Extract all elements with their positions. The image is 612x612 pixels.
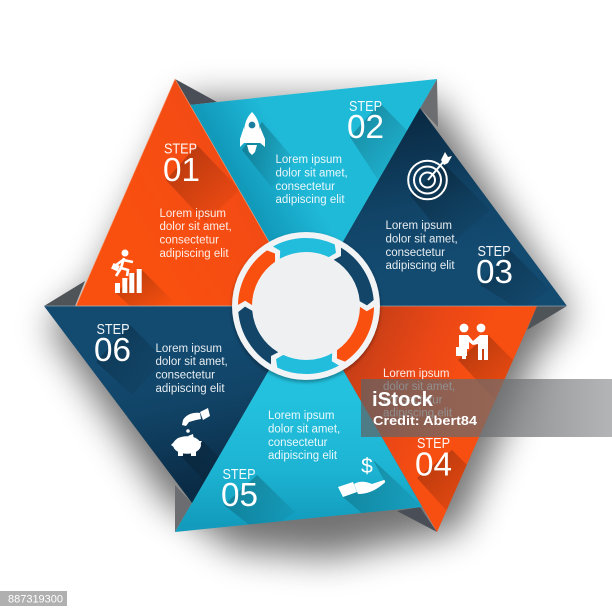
center hub — [231, 232, 381, 382]
text block 04: adipiscing elit — [383, 408, 453, 420]
long shadow: target and number — [410, 165, 550, 310]
watermark text — [372, 388, 478, 428]
text block 06: adipiscing elit — [156, 383, 225, 395]
text block 01: Lorem ipsum — [160, 208, 226, 220]
text block 06: dolor sit amet, — [156, 356, 228, 368]
panel: step 05 — [175, 370, 422, 532]
text block 01: dolor sit amet, — [160, 221, 232, 233]
watermark text: Credit: Abert84 — [373, 413, 478, 428]
step 05 label: STEP — [222, 466, 256, 483]
text block 01: adipiscing elit — [160, 248, 229, 260]
text block 03: adipiscing elit — [386, 260, 455, 272]
panel: step 06 — [44, 306, 269, 503]
text block 04: Lorem ipsum — [383, 368, 449, 380]
text block 05: adipiscing elit — [268, 450, 338, 462]
image id tag — [0, 591, 67, 606]
long shadow: runner and number — [116, 145, 240, 306]
panel: step 02 — [190, 79, 437, 242]
icon: handshake — [456, 324, 488, 360]
text block 01: consectetur — [160, 234, 219, 246]
text block 06: consectetur — [156, 370, 215, 382]
step 01 label: STEP — [164, 140, 197, 158]
step 03 label: 03 — [476, 253, 513, 290]
text block 05 — [268, 410, 340, 462]
text block 03: consectetur — [386, 247, 445, 259]
text block 03: dolor sit amet, — [386, 234, 458, 246]
icon: piggy bank — [171, 408, 210, 456]
divider line — [44, 306, 567, 307]
icon: hand with coin: $ — [361, 455, 373, 478]
text block 01 — [160, 208, 232, 260]
folded corners — [44, 79, 567, 532]
text block 04: dolor sit amet, — [383, 381, 455, 393]
icon: hand with coin — [338, 455, 385, 497]
text block 05: dolor sit amet, — [268, 424, 340, 436]
panel: step 01 — [76, 78, 270, 306]
step 05 label: 05 — [221, 476, 258, 513]
circular arrows — [231, 238, 381, 374]
step 02 label: STEP — [349, 98, 382, 115]
icon: runner on bars — [111, 250, 142, 293]
text block 02: dolor sit amet, — [276, 168, 348, 180]
panel: step 04 — [343, 306, 537, 532]
text block 02 — [276, 154, 348, 206]
text block 02: adipiscing elit — [276, 194, 345, 206]
step 06 label: STEP — [96, 321, 130, 338]
step 06 label: 06 — [94, 331, 131, 368]
step 01 label: 01 — [163, 151, 200, 188]
text block 06: Lorem ipsum — [156, 343, 222, 355]
icon: rocket — [240, 112, 265, 155]
panel: step 03 — [343, 108, 567, 306]
long shadow: handshake and number — [417, 335, 513, 510]
text block 03 — [386, 220, 458, 272]
icon: target — [408, 152, 452, 199]
text block 03: Lorem ipsum — [386, 220, 452, 232]
text block 04 — [383, 368, 455, 420]
text block 02: consectetur — [276, 181, 335, 193]
step 03 label: STEP — [478, 243, 510, 260]
text block 05: consectetur — [268, 437, 328, 449]
image id tag: 887319300 — [8, 594, 63, 606]
inner disc — [252, 252, 360, 360]
long shadow: hand and number — [224, 460, 416, 524]
text block 04: consectetur — [383, 394, 443, 406]
step 04 label: 04 — [415, 446, 452, 482]
long shadow: rocket and number — [242, 103, 418, 188]
watermark text: iStock — [372, 388, 434, 411]
drop shadow — [48, 100, 570, 558]
text block 02: Lorem ipsum — [276, 154, 342, 166]
watermark band — [361, 379, 612, 437]
text block 05: Lorem ipsum — [268, 410, 334, 422]
text block 06 — [156, 343, 228, 395]
long shadow: piggy and number — [96, 325, 218, 475]
step 02 label: 02 — [347, 108, 384, 145]
step 04 label: STEP — [417, 435, 450, 452]
